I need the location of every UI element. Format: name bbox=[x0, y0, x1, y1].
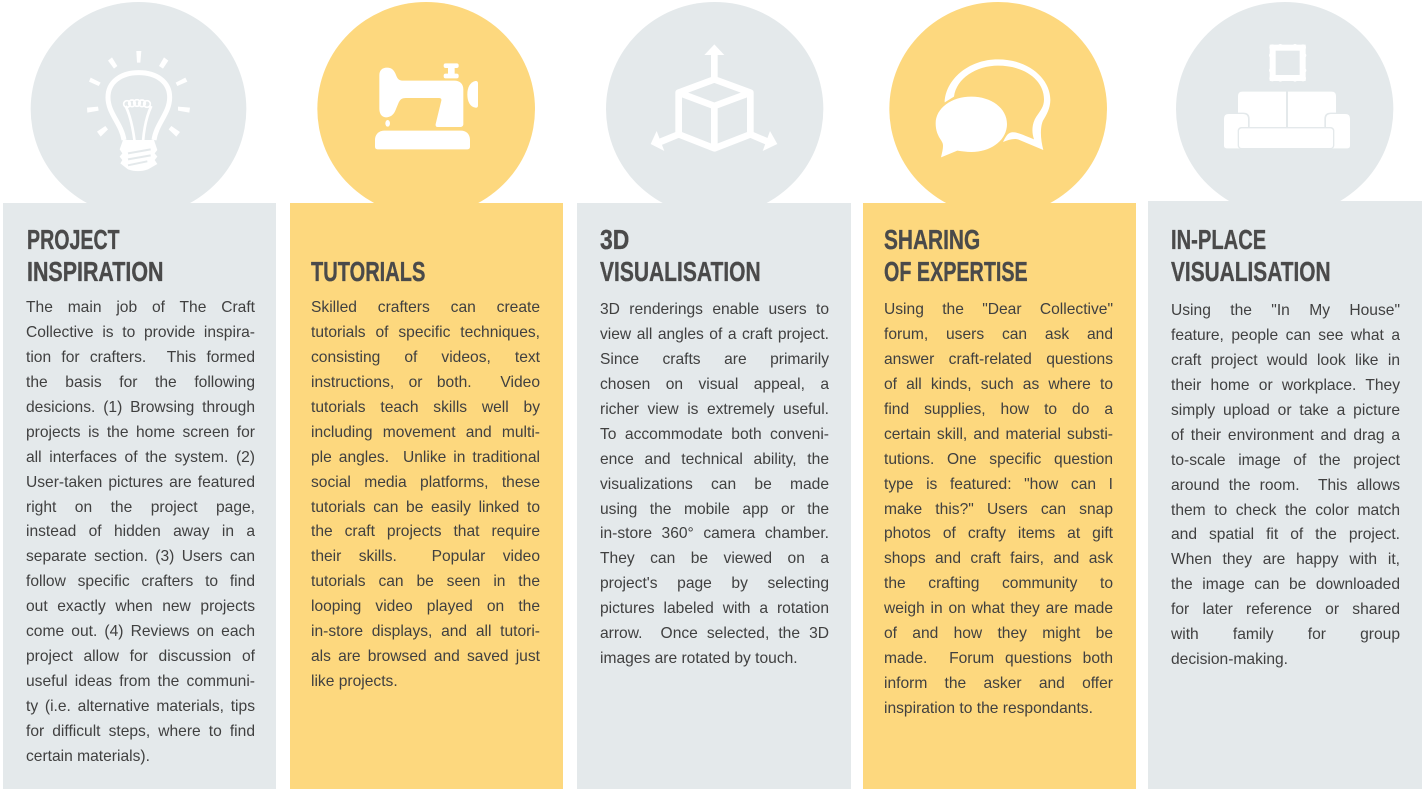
text: project inspiration body: tion for crafters. This formed bbox=[26, 349, 255, 366]
text: sharing of expertise body: certain skill, and material substi- bbox=[884, 426, 1113, 443]
text: 3D visualisation body: ence and technical ability, the bbox=[600, 451, 829, 468]
heading: 3D visualisation: 3D bbox=[600, 224, 629, 255]
text: in-place visualisation body: When they are happy with it, bbox=[1171, 551, 1400, 568]
text: project inspiration body bbox=[26, 299, 255, 765]
icon: light bulb in circle bbox=[30, 2, 246, 203]
text: sharing of expertise body: find supplies, how to do a bbox=[884, 401, 1113, 418]
card background: in-place visualisation bbox=[1148, 201, 1422, 789]
text: project inspiration body: separate section. (3) Users can bbox=[26, 548, 255, 565]
text: project inspiration body: Collective is to provide inspira- bbox=[26, 324, 255, 341]
text: sharing of expertise body: Using the "Dear Collective" bbox=[884, 301, 1113, 318]
text: in-place visualisation body: around the room. This allows bbox=[1171, 477, 1400, 494]
text: 3D visualisation body: They can be viewed on a bbox=[600, 550, 829, 567]
text: in-place visualisation body: them to check the color match bbox=[1171, 502, 1400, 518]
heading: sharing of expertise: OF EXPERTISE bbox=[884, 256, 1028, 287]
text: sharing of expertise body: answer craft-related questions bbox=[884, 351, 1113, 368]
icon: sewing machine in circle bbox=[317, 2, 535, 203]
text: project inspiration body: project allow for discussion of bbox=[26, 648, 255, 665]
text: 3D visualisation body: To accommodate both conveni- bbox=[600, 426, 829, 443]
heading: project inspiration bbox=[27, 224, 163, 287]
heading: in-place visualisation: IN-PLACE bbox=[1171, 224, 1266, 255]
text: in-place visualisation body: for later reference or shared bbox=[1171, 601, 1400, 618]
panel: sharing of expertise bbox=[863, 2, 1136, 789]
text: sharing of expertise body bbox=[884, 301, 1113, 717]
text: in-place visualisation body: to-scale image of the project bbox=[1171, 452, 1400, 469]
text: sharing of expertise body: weigh in on what they are made bbox=[884, 600, 1113, 617]
text: project inspiration body: follow specific crafters to find bbox=[26, 573, 255, 590]
icon: 3D cube with axis arrows in circle bbox=[606, 2, 824, 203]
text: project inspiration body: out exactly when new projects bbox=[26, 598, 255, 615]
text: 3D visualisation body: 3D renderings enable users to bbox=[600, 301, 829, 318]
text: sharing of expertise body: tutions. One specific question bbox=[884, 451, 1113, 468]
heading: project inspiration: PROJECT bbox=[27, 224, 120, 255]
text: tutorials body: tutorials can be easily linked to bbox=[311, 498, 540, 516]
text: 3D visualisation body bbox=[600, 301, 829, 667]
text: tutorials body: their skills. Popular video bbox=[311, 548, 540, 565]
text: tutorials body: tutorials teach skills well by bbox=[311, 399, 540, 416]
heading: in-place visualisation: VISUALISATION bbox=[1171, 256, 1331, 287]
card background: 3D visualisation bbox=[577, 203, 851, 789]
text: 3D visualisation body: in-store 360° camera chamber. bbox=[600, 525, 829, 542]
text: project inspiration body: for difficult steps, where to find bbox=[26, 723, 255, 740]
text: tutorials body: tutorials of specific techniques, bbox=[311, 324, 540, 341]
text: sharing of expertise body: inform the asker and offer bbox=[884, 675, 1113, 692]
icon: sofa and picture frame in circle bbox=[1176, 2, 1394, 201]
text: sharing of expertise body: photos of crafty items at gift bbox=[884, 525, 1113, 542]
text: in-place visualisation body: of their environment and drag a bbox=[1171, 427, 1400, 444]
text: in-place visualisation body: their home or workplace. They bbox=[1171, 377, 1400, 394]
text: project inspiration body: projects is the home screen for bbox=[26, 424, 255, 441]
text: project inspiration body: come out. (4) Reviews on each bbox=[26, 623, 255, 640]
text: in-place visualisation body: and spatial fit of the project. bbox=[1171, 526, 1400, 543]
text: tutorials body: instructions, or both. Video bbox=[311, 374, 540, 391]
icon: speech bubbles in circle bbox=[889, 2, 1107, 203]
text: tutorials body: ple angles. Unlike in traditional bbox=[311, 449, 540, 466]
text: 3D visualisation body: Since crafts are primarily bbox=[600, 351, 829, 368]
text: project inspiration body: the basis for the following bbox=[26, 374, 255, 391]
text: sharing of expertise body: of and how they might be bbox=[884, 625, 1113, 642]
text: in-place visualisation body: decision-making. bbox=[1171, 651, 1288, 668]
text: tutorials body: looping video played on the bbox=[311, 598, 540, 615]
heading: sharing of expertise: SHARING bbox=[884, 224, 980, 255]
text: in-place visualisation body: Using the "In My House" bbox=[1171, 302, 1400, 319]
text: project inspiration body: instead of hidden away in a bbox=[26, 523, 255, 540]
text: 3D visualisation body: arrow. Once selected, the 3D bbox=[600, 625, 829, 642]
panel: project inspiration bbox=[3, 2, 276, 789]
panel: in-place visualisation bbox=[1148, 2, 1422, 789]
text: tutorials body: consisting of videos, text bbox=[311, 349, 540, 366]
text: 3D visualisation body: using the mobile app or the bbox=[600, 500, 829, 518]
text: 3D visualisation body: richer view is extremely useful. bbox=[600, 401, 829, 418]
text: 3D visualisation body: project's page by selecting bbox=[600, 575, 829, 592]
text: sharing of expertise body: shops and craft fairs, and ask bbox=[884, 550, 1113, 567]
text: in-place visualisation body: craft project would look like in bbox=[1171, 352, 1400, 369]
heading: in-place visualisation bbox=[1171, 224, 1331, 287]
text: sharing of expertise body: type is featured: "how can I bbox=[884, 476, 1113, 493]
text: project inspiration body: User-taken pictures are featured bbox=[26, 474, 255, 491]
text: sharing of expertise body: forum, users can ask and bbox=[884, 326, 1113, 343]
text: project inspiration body: right on the project page, bbox=[26, 498, 255, 516]
text: 3D visualisation body: pictures labeled with a rotation bbox=[600, 600, 829, 617]
text: sharing of expertise body: inspiration to the respondants. bbox=[884, 700, 1093, 717]
text: 3D visualisation body: images are rotated by touch. bbox=[600, 650, 798, 667]
text: project inspiration body: useful ideas from the communi- bbox=[26, 673, 255, 690]
text: 3D visualisation body: view all angles of a craft project. bbox=[600, 326, 829, 343]
heading: sharing of expertise bbox=[884, 224, 1028, 287]
text: sharing of expertise body: made. Forum questions both bbox=[884, 650, 1113, 667]
text: tutorials body bbox=[311, 299, 540, 690]
text: 3D visualisation body: visualizations can be made bbox=[600, 476, 829, 493]
heading: 3D visualisation: VISUALISATION bbox=[600, 256, 761, 287]
text: in-place visualisation body: the image can be downloaded bbox=[1171, 576, 1400, 593]
text: project inspiration body: desicions. (1) Browsing through bbox=[26, 399, 255, 416]
panel: 3D visualisation bbox=[577, 2, 851, 789]
heading: project inspiration: INSPIRATION bbox=[27, 256, 163, 287]
text: sharing of expertise body: make this?" Users can snap bbox=[884, 500, 1113, 518]
text: sharing of expertise body: the crafting community to bbox=[884, 575, 1113, 592]
text: tutorials body: in-store displays, and all tutori- bbox=[311, 623, 540, 640]
text: in-place visualisation body bbox=[1171, 302, 1400, 668]
heading: 3D visualisation bbox=[600, 224, 761, 287]
text: tutorials body: social media platforms, these bbox=[311, 474, 540, 491]
text: project inspiration body: all interfaces of the system. (2) bbox=[26, 449, 255, 466]
heading: tutorials: TUTORIALS bbox=[311, 256, 425, 287]
text: sharing of expertise body: of all kinds, such as where to bbox=[884, 376, 1113, 393]
text: tutorials body: like projects. bbox=[311, 673, 398, 690]
panel: tutorials bbox=[290, 2, 563, 789]
card background: sharing of expertise bbox=[863, 203, 1136, 789]
text: 3D visualisation body: chosen on visual appeal, a bbox=[600, 376, 829, 393]
text: tutorials body: Skilled crafters can create bbox=[311, 299, 540, 316]
text: tutorials body: als are browsed and saved just bbox=[311, 648, 540, 665]
text: in-place visualisation body: feature, people can see what a bbox=[1171, 327, 1400, 344]
text: tutorials body: the craft projects that require bbox=[311, 523, 540, 540]
card background: tutorials bbox=[290, 203, 563, 789]
text: project inspiration body: The main job of The Craft bbox=[26, 299, 255, 316]
text: tutorials body: including movement and multi- bbox=[311, 424, 540, 441]
text: project inspiration body: ty (i.e. alternative materials, tips bbox=[26, 698, 255, 715]
text: in-place visualisation body: simply upload or take a picture bbox=[1171, 402, 1400, 419]
text: project inspiration body: certain materials). bbox=[26, 748, 150, 765]
card background: project inspiration bbox=[3, 203, 276, 789]
text: in-place visualisation body: with family for group bbox=[1171, 626, 1400, 643]
text: tutorials body: tutorials can be seen in the bbox=[311, 573, 540, 590]
